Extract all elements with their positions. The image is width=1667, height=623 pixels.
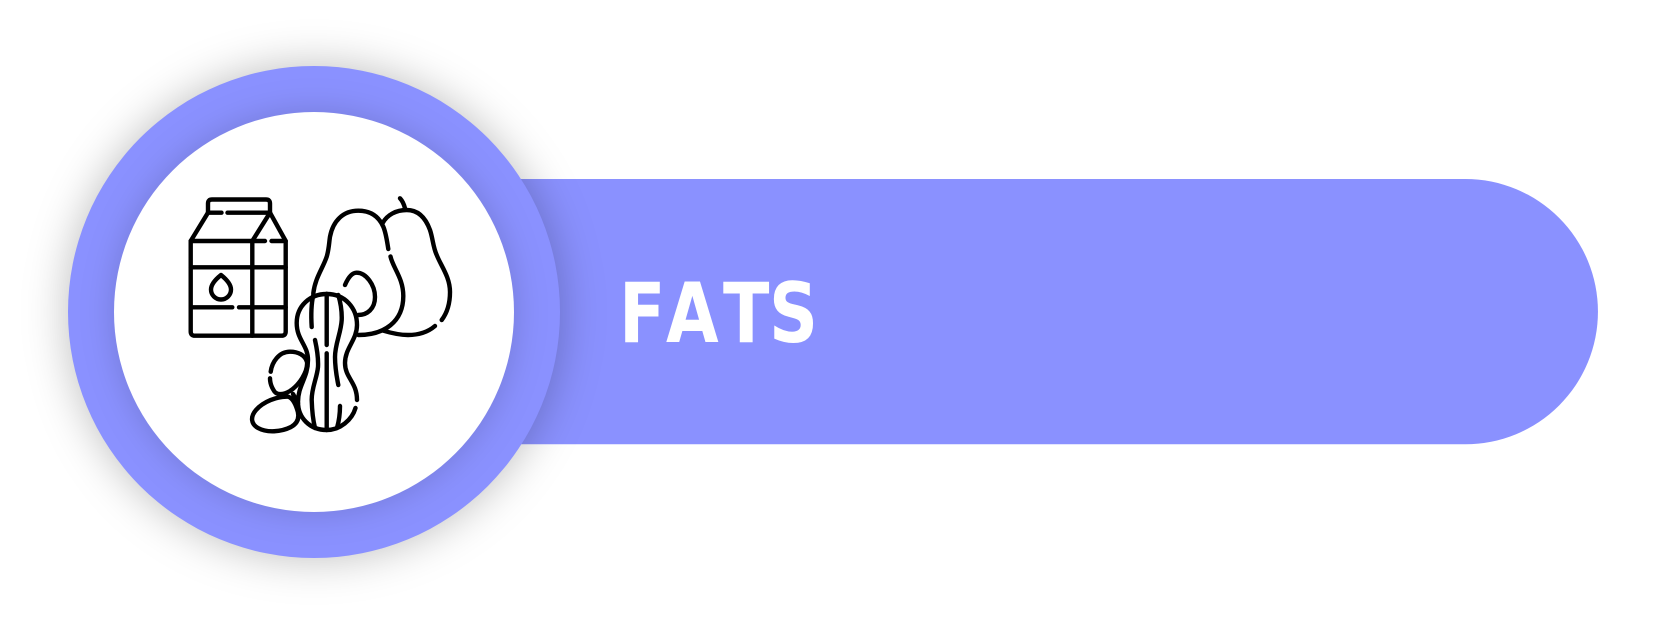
circle badge white centre [114,112,514,512]
icon: peanut [297,294,357,430]
icon: avocados [313,198,450,335]
ring inner shading [112,110,516,514]
heading: FATS: FATS [619,265,818,362]
icon: fat foods [191,198,450,431]
circle badge outer ring [68,66,560,558]
icon: almonds [252,352,307,431]
icon: milk drop [211,275,231,300]
circle drop shadow [68,66,560,558]
icon: milk carton [191,200,286,336]
label bar [400,179,1598,444]
